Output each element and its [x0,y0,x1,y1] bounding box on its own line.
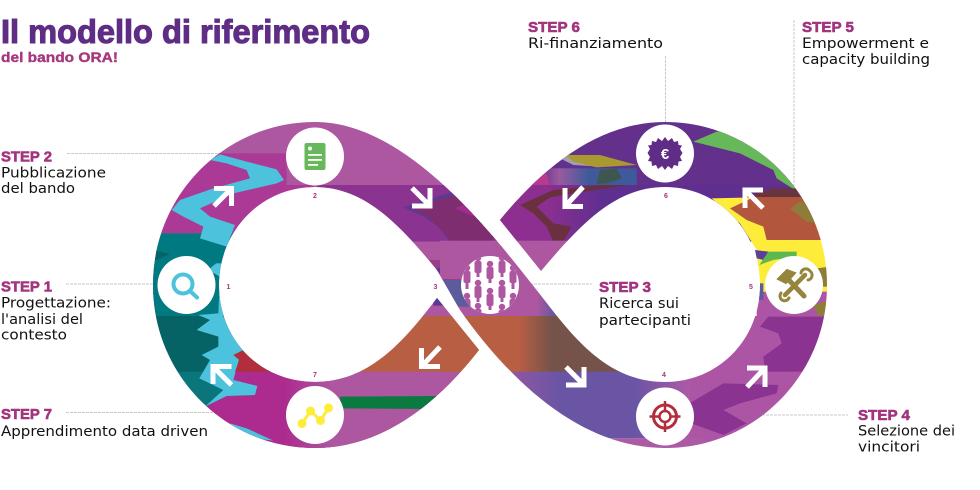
label: step 2: STEP 2 [1,148,52,166]
purple top-centre [317,185,517,242]
label: step 6: STEP 6 [528,19,580,36]
label: step 5 [802,19,930,68]
label: step 5: Empowerment e [802,36,929,52]
label: step 1 [1,278,111,344]
small numbers on the loop: 1 [227,284,231,291]
infinity loop band [140,110,833,453]
label: step 4: STEP 4 [858,407,911,424]
leader line: step 3 [530,283,592,285]
pink lower right of left loop [274,372,461,448]
icon: document (step 2) [286,128,344,186]
icon: people (step 3) [461,255,519,318]
label: step 5: capacity building [802,52,930,68]
leader line: step 4 [690,414,848,416]
label: step 7: Apprendimento data driven [1,424,208,440]
small numbers on the loop: 3 [434,284,438,291]
leader line: step 7 [66,412,291,414]
arrow: toward step 1 [213,366,232,385]
label: step 4 [858,407,955,456]
arrow: toward step 6 end [565,187,583,206]
label: step 4: Selezione dei [858,424,955,440]
small numbers on the loop: 6 [664,193,668,200]
label: step 2: Pubblicazione [1,166,106,182]
label: step 3: partecipanti [599,313,691,329]
icon: search (step 1) [158,256,216,314]
label: step 7 [1,406,208,440]
arrow: step 2 direction [214,188,232,206]
small numbers on the loop: 5 [749,284,753,291]
label: step 7: STEP 7 [1,406,52,423]
title: Il modello di riferimento [1,13,370,50]
label: step 1: Progettazione: [1,296,111,312]
yellow block [712,197,833,292]
cyan stream [172,154,284,247]
small numbers on the loop: 7 [313,372,317,379]
label: step 1: l'analisi del [1,312,83,328]
label: step 6: Ri-finanziamento [528,36,663,52]
small numbers on the loop [227,193,753,379]
label: step 1: contesto [1,328,67,344]
right loop colour stripes [440,110,833,453]
icon: target (step 4) [636,388,694,446]
icon: tools (step 5) [765,256,823,314]
icon: euro badge (step 6): € [661,146,670,163]
leader line: step 6 [664,56,666,130]
icon: euro badge (step 6) [636,124,694,182]
label: step 6 [528,19,663,52]
left loop colour stripes [140,110,517,452]
leader line: step 2 [67,152,291,154]
label: step 5: STEP 5 [802,19,854,36]
orange lower-centre [353,316,483,372]
arrow: toward step 3 [412,188,430,206]
label: step 3: STEP 3 [599,279,651,296]
label: step 2 [1,148,106,197]
arrow: toward step 4 [566,367,584,385]
leader line: step 1 [66,283,162,285]
brown block [730,197,821,240]
green stripe [340,396,440,409]
small numbers on the loop: 4 [662,372,666,379]
label: step 3 [599,279,691,329]
label: step 1: STEP 1 [1,278,52,296]
arrow: toward step 7 [422,347,440,366]
label: step 4: vincitori [858,440,920,456]
arrow: toward step 6 [745,190,763,208]
magenta lower arc [206,372,346,448]
leader line: step 5 [793,20,795,262]
icon: data line (step 7) [286,386,344,444]
label: step 2: del bando [1,181,75,197]
green top-right [694,132,797,190]
label: step 3: Ricerca sui [599,296,679,312]
lower right [757,292,833,317]
subtitle: del bando ORA! [1,49,118,65]
small numbers on the loop: 2 [313,193,317,200]
arrow: toward step 5 [747,368,765,387]
red patch [233,350,273,372]
centre band continuing to lower right [506,278,557,316]
